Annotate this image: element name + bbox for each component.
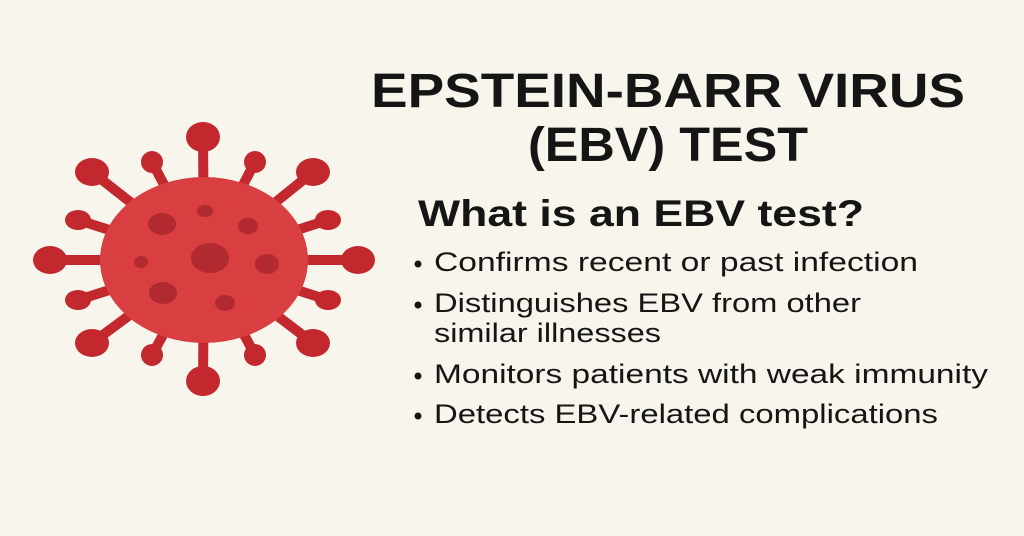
bullet 2: Distinguishes EBV from other bbox=[434, 288, 861, 318]
bullet list bbox=[414, 247, 989, 429]
title: (EBV) TEST bbox=[528, 119, 808, 172]
bullet 2: similar illnesses bbox=[434, 318, 661, 348]
heading: What is an EBV test?: What is an EBV test? bbox=[418, 193, 864, 234]
bullet 4: Detects EBV-related complications bbox=[434, 399, 938, 429]
title: EPSTEIN-BARR VIRUS bbox=[371, 65, 965, 118]
icon: red virus bbox=[33, 122, 375, 396]
title bbox=[371, 65, 965, 172]
bullet 2 bbox=[414, 288, 861, 348]
bullet 1: Confirms recent or past infection bbox=[434, 247, 918, 277]
bullet 3: Monitors patients with weak immunity bbox=[434, 359, 989, 389]
